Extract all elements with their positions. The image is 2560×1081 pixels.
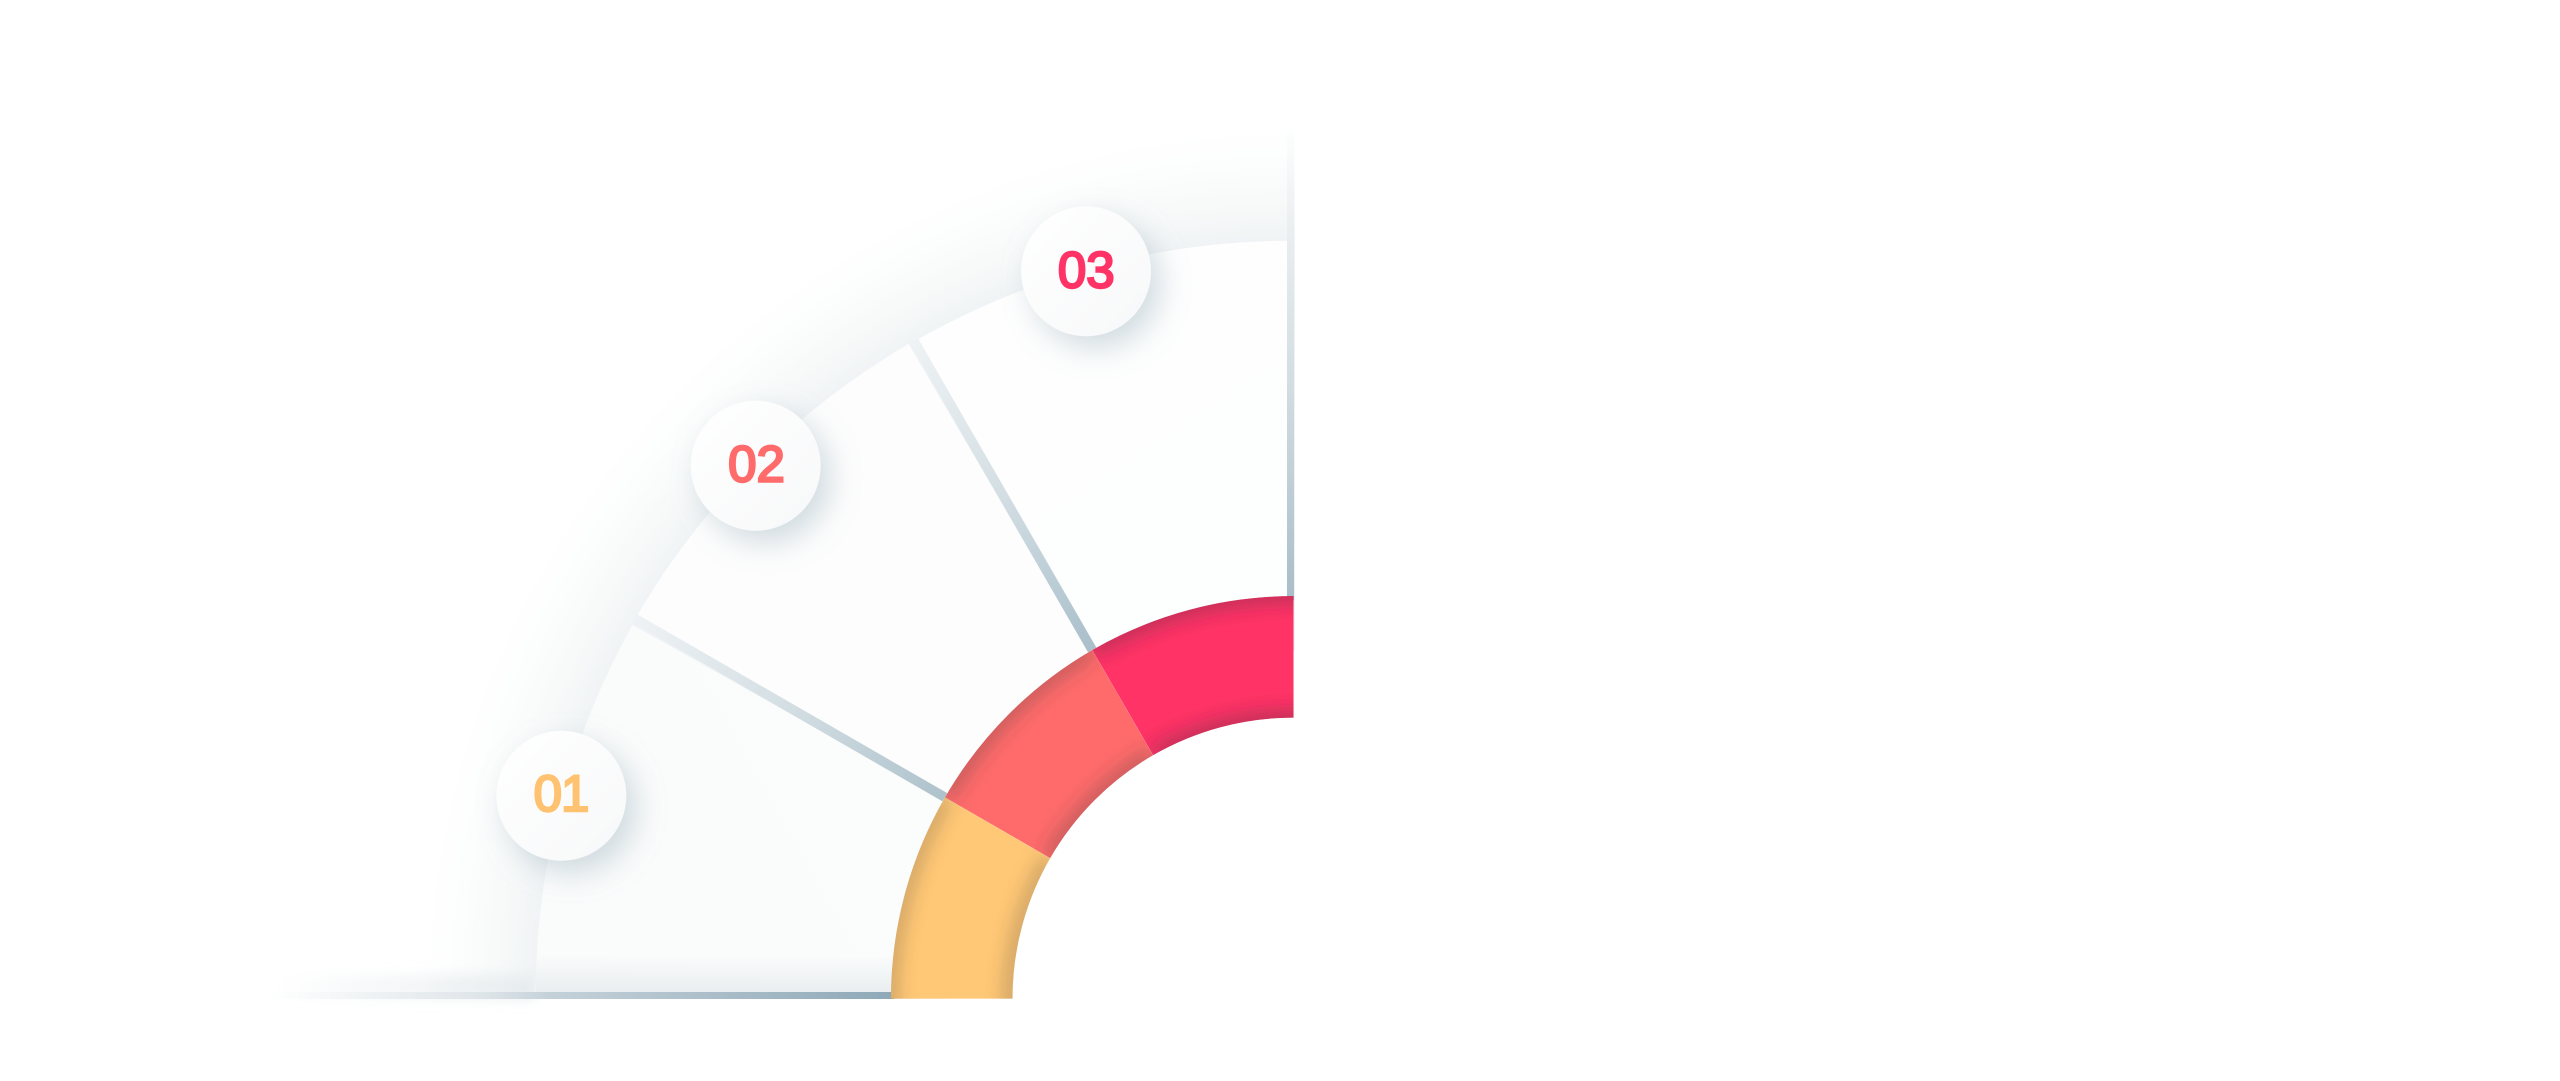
ring segment: pink — [1092, 596, 1294, 756]
badge 02 — [691, 401, 821, 531]
panel: sector 03 — [918, 241, 1287, 648]
badge 03 — [1021, 206, 1151, 336]
divider bar at 30 degrees — [635, 618, 945, 797]
badge 02: 02 — [728, 436, 785, 492]
panel: sector 02 — [638, 344, 1090, 795]
bottom edge bar — [270, 992, 894, 999]
ring segment: yellow — [891, 798, 1050, 999]
soft shadow band around the quarter circle — [420, 120, 1295, 999]
right edge bar — [1287, 130, 1294, 600]
panel: sector 01 — [536, 625, 945, 992]
divider bar at 60 degrees — [913, 340, 1092, 650]
sector 01 floor shading — [536, 955, 892, 992]
bottom shadow fade — [270, 975, 535, 999]
badge 03: 03 — [1058, 241, 1115, 298]
badge 01 — [496, 731, 626, 861]
infographic canvas — [322, 161, 1295, 1001]
badge 01: 01 — [534, 765, 588, 822]
ring segment: coral — [945, 650, 1153, 858]
